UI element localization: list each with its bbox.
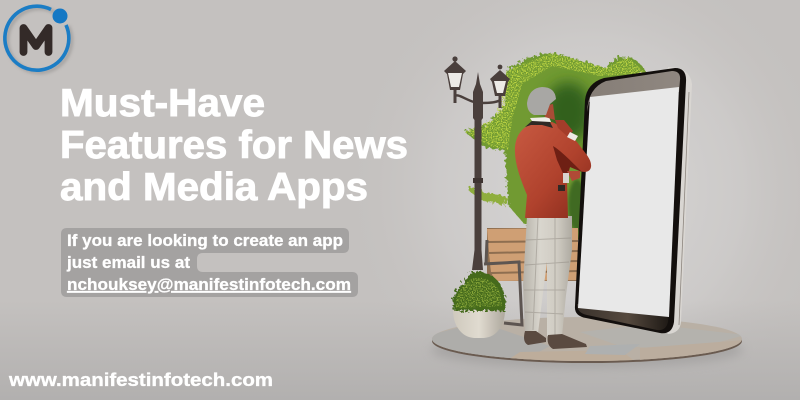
bench frame bbox=[484, 240, 522, 325]
website url: www.manifestinfotech.com bbox=[8, 370, 273, 390]
raised hand and cuff bbox=[555, 120, 573, 137]
logo blue ring bbox=[5, 6, 69, 70]
phone bbox=[575, 67, 692, 334]
platform disc bbox=[430, 317, 745, 368]
tree dark shade bbox=[544, 82, 592, 142]
right lantern bbox=[490, 65, 510, 108]
jacket collar bbox=[525, 120, 553, 128]
phone screen bbox=[578, 87, 679, 317]
contact callout bbox=[61, 228, 358, 297]
lamp post bbox=[472, 72, 483, 270]
bench bbox=[484, 228, 578, 325]
bush bbox=[453, 271, 506, 311]
hair bbox=[527, 87, 556, 115]
tree highlight speckle bbox=[465, 53, 646, 150]
jacket sleeve shadow bbox=[553, 146, 582, 180]
logo blue dot bbox=[52, 8, 68, 24]
tree lower shade bbox=[568, 179, 586, 231]
trousers bbox=[523, 216, 572, 336]
title: Must-Have bbox=[60, 82, 265, 125]
3d scene illustration bbox=[430, 53, 745, 368]
potted plant bbox=[453, 271, 506, 338]
tree lower left sprig bbox=[468, 186, 508, 205]
callout text: nchouksey@manifestinfotech.com bbox=[67, 276, 351, 294]
callout text: If you are looking to create an app bbox=[67, 232, 343, 250]
title: Features for News bbox=[60, 124, 408, 167]
callout text bbox=[66, 232, 351, 294]
title bbox=[60, 82, 408, 209]
phone top bezel bbox=[587, 71, 680, 112]
trouser plaid bbox=[524, 217, 571, 335]
logo ring shadow bbox=[7, 8, 71, 72]
phone bottom bezel bbox=[577, 304, 669, 330]
lower hand and cuff bbox=[567, 171, 580, 181]
callout highlight backgrounds bbox=[61, 228, 358, 297]
jacket bbox=[515, 122, 591, 218]
street lamp bbox=[444, 56, 510, 270]
logo bbox=[5, 6, 71, 72]
callout text: just email us at bbox=[66, 254, 191, 272]
tree bbox=[465, 53, 646, 240]
shoes bbox=[524, 331, 587, 349]
lamp arms bbox=[455, 95, 500, 103]
title: and Media Apps bbox=[60, 166, 368, 209]
neck and ear bbox=[543, 104, 555, 120]
plant pot bbox=[453, 310, 505, 338]
bench slats bbox=[487, 228, 578, 281]
tree canopy bbox=[465, 53, 646, 240]
bush highlights bbox=[456, 278, 502, 308]
phone silver side bbox=[664, 67, 692, 334]
phone black frame bbox=[575, 68, 686, 333]
logo letter M bbox=[24, 28, 48, 52]
left lantern bbox=[444, 56, 466, 103]
man bbox=[515, 87, 591, 349]
